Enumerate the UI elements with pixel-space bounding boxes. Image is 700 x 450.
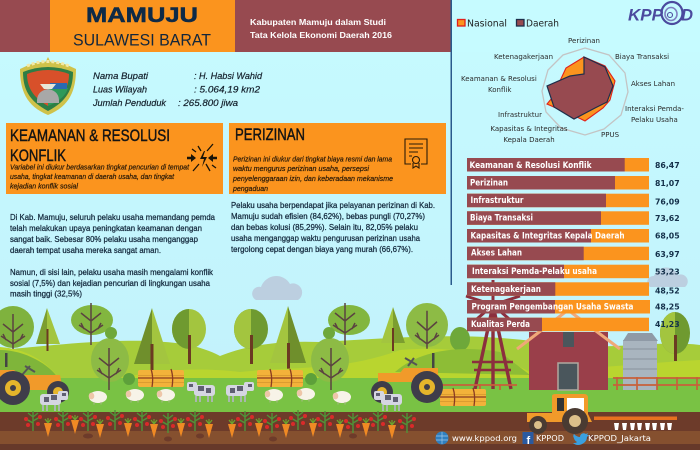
radar chart: Pelaku Usaha <box>631 116 678 124</box>
radar chart: Kepala Daerah <box>503 136 555 144</box>
radar chart: Perizinan <box>568 37 600 45</box>
legend <box>458 18 559 30</box>
bar chart: 73,62 <box>655 214 680 223</box>
text block: keamanan body <box>10 212 215 298</box>
panel: perizinan <box>229 123 446 194</box>
bar chart: Kualitas Perda <box>471 319 530 329</box>
footer links <box>436 432 651 447</box>
header subtitle: Tata Kelola Ekonomi Daerah 2016 <box>250 30 392 40</box>
icon: regency emblem <box>20 57 76 115</box>
radar chart: Ketenagakerjaan <box>494 53 553 61</box>
panel: perizinan: Perizinan ini diukur dari tingkat biaya resmi dan lama <box>233 154 392 164</box>
back hills <box>0 336 700 415</box>
landscape illustration <box>0 267 700 450</box>
fences <box>440 377 700 390</box>
midground meadow <box>0 347 700 415</box>
radar chart: Biaya Transaksi <box>615 53 669 61</box>
bar chart: 48,25 <box>655 302 680 312</box>
bar chart: Perizinan <box>470 178 508 188</box>
legend: Nasional <box>467 18 507 30</box>
crops <box>24 410 416 439</box>
bar chart: 41,23 <box>655 320 680 329</box>
text block: perizinan body: tergolong cepat dengan biaya yang murah (66,67%). <box>231 244 413 254</box>
bar chart: Program Pengembangan Usaha Swasta <box>472 302 634 312</box>
radar chart: Konflik <box>488 86 512 94</box>
panel: perizinan: waktu mengurus perizinan usaha, persepsi <box>233 164 369 173</box>
regency facts <box>92 70 263 108</box>
radar chart: Kapasitas & Integritas <box>490 125 568 133</box>
text block: keamanan body: telah melakukan upaya peningkatan keamanan dengan <box>10 223 202 233</box>
bar chart: Infrastruktur <box>470 195 524 205</box>
title block <box>50 0 235 52</box>
bar chart: 68,05 <box>655 232 680 240</box>
radar chart: Akses Lahan <box>631 80 675 88</box>
foreground grass <box>0 378 700 413</box>
regency facts: Luas Wilayah <box>93 84 147 94</box>
text block: keamanan body: daerah tempat usaha mereka sangat aman. <box>10 245 161 255</box>
barn <box>517 310 620 390</box>
radar chart <box>461 37 684 144</box>
bar chart: 53,23 <box>655 268 680 276</box>
radar chart: Keamanan & Resolusi <box>461 75 537 83</box>
windmill <box>466 280 520 389</box>
cloud left <box>252 276 302 300</box>
panel: keamanan <box>6 123 223 194</box>
icon: conflict <box>187 144 217 171</box>
radar chart: Infrastruktur <box>498 111 542 119</box>
bar chart: Ketenagakerjaan <box>471 284 541 294</box>
footer links: KPPOD_Jakarta <box>588 434 651 443</box>
regency facts: Jumlah Penduduk <box>92 97 167 108</box>
text block: keamanan body: Di Kab. Mamuju, seluruh pelaku usaha memandang pemda <box>10 212 215 222</box>
vertical divider <box>450 0 452 285</box>
footer links: KPPOD <box>536 434 564 443</box>
bar chart: Biaya Transaksi <box>470 212 533 222</box>
text block: keamanan body: sangat baik. Sebesar 80% pelaku usaha menganggap <box>10 234 198 244</box>
text block: keamanan body: masih tinggi (32,5%) <box>10 288 82 298</box>
bar chart: Kapasitas & Integritas Kepala Daerah <box>470 230 625 240</box>
cloud right <box>647 267 688 287</box>
bar chart: Keamanan & Resolusi Konflik <box>470 160 592 170</box>
regency facts: : H. Habsi Wahid <box>194 70 263 81</box>
panel: keamanan: KONFLIK <box>10 146 67 165</box>
text block: perizinan body: Pelaku usaha berpendapat jika pelayanan perizinan di Kab. <box>231 200 435 210</box>
regency facts: : 5.064,19 km2 <box>194 84 261 94</box>
right column background panel <box>452 0 700 52</box>
header subtitle <box>250 17 392 40</box>
regency facts: Nama Bupati <box>93 70 149 81</box>
logo: KPPOD: D <box>681 6 693 24</box>
logo: KPPOD: KPP <box>628 6 664 24</box>
bar chart: Akses Lahan <box>471 248 522 258</box>
bar chart: 81,07 <box>655 179 680 188</box>
text block: perizinan body: dan bebas kolusi (85,29%). Selain itu, 82,05% pelaku <box>231 222 418 232</box>
hay bales <box>138 369 486 406</box>
header band <box>0 0 700 52</box>
bar chart: 76,09 <box>655 198 680 206</box>
bar chart: 86,47 <box>655 161 680 170</box>
panel: perizinan: penyelenggaraan izin, dan keberadaan mekanisme <box>232 174 393 183</box>
logo: KPPOD <box>628 2 693 24</box>
title block: MAMUJU <box>86 4 198 27</box>
text block: keamanan body: Namun, di sisi lain, pelaku usaha masih mengalami konflik <box>10 267 214 277</box>
title block: SULAWESI BARAT <box>73 32 211 50</box>
panel: keamanan: usaha, tingkat keamanan di daerah usaha, dan tingkat <box>10 172 175 181</box>
panel: perizinan: pengaduan <box>232 184 268 193</box>
regency facts: : 265.800 jiwa <box>178 97 238 108</box>
footer links: f <box>526 435 530 447</box>
panel: keamanan: KEAMANAN & RESOLUSI <box>10 126 170 145</box>
legend: Daerah <box>526 18 559 30</box>
tractor right <box>371 353 443 403</box>
radar chart: Interaksi Pemda- <box>625 105 684 113</box>
tree row <box>0 303 690 371</box>
icon: certificate <box>405 139 427 168</box>
panel: keamanan: kejadian konflik sosial <box>10 182 78 190</box>
text block: perizinan body <box>231 200 435 254</box>
animals <box>40 382 402 411</box>
bar chart <box>467 158 680 331</box>
midground trees <box>91 327 349 390</box>
header subtitle: Kabupaten Mamuju dalam Studi <box>250 17 386 27</box>
panel: perizinan: PERIZINAN <box>235 125 305 144</box>
footer links: www.kppod.org <box>452 434 517 443</box>
silo <box>623 333 658 390</box>
soil <box>0 412 700 431</box>
text block: perizinan body: Mamuju sudah efisien (84,62%), bebas pungli (70,27%) <box>231 211 425 221</box>
text block: perizinan body: usaha menganggap waktu pengurusan perizinan usaha <box>231 233 420 243</box>
text block: keamanan body: sosial (7,5%) dan kejadian pencurian di lingkungan usaha <box>10 278 210 288</box>
bar chart: 48,52 <box>655 286 680 296</box>
bar chart: 63,97 <box>655 250 680 259</box>
radar chart: PPUS <box>601 131 620 139</box>
plow tractor <box>527 394 677 434</box>
panel: keamanan: Variabel ini diukur berdasarkan tingkat pencurian di tempat <box>10 162 190 172</box>
bar chart: Interaksi Pemda-Pelaku usaha <box>472 266 597 276</box>
tractor left <box>0 353 69 405</box>
